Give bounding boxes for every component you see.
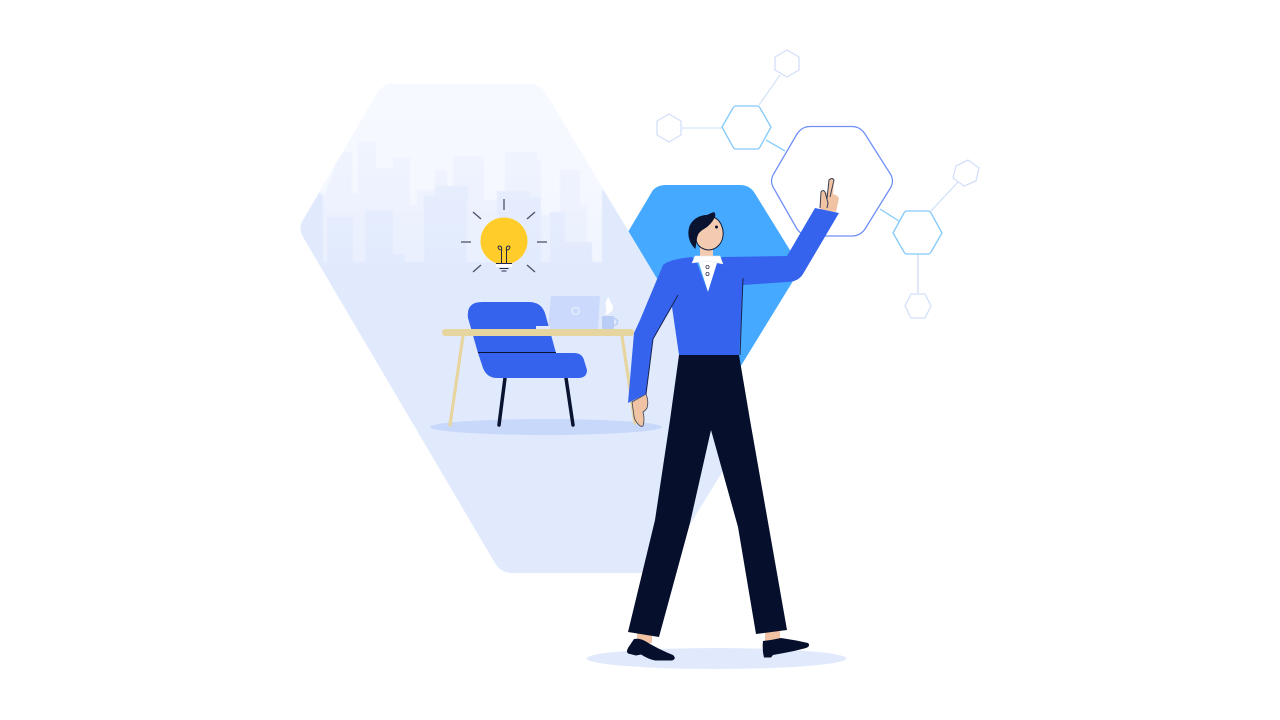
small pale hexagons [657,50,979,318]
skyline [320,84,604,262]
chair [468,302,587,425]
desk shadow [430,419,662,435]
laptop [536,296,600,329]
large outlined hexagon [772,126,892,236]
shirt [698,260,717,292]
bulb rays [461,199,547,272]
shoes [627,638,809,660]
network links [682,75,958,293]
pale hexagon with city skyline [300,84,722,573]
foreground buildings [328,186,592,262]
sky [320,84,604,262]
coffee cup [602,297,618,329]
illustration [300,50,980,669]
light bulb [461,199,547,272]
face [696,217,723,250]
desk [442,329,635,425]
person [627,178,839,660]
background buildings [323,141,587,262]
blue hexagon [628,185,801,400]
ankles [637,630,780,643]
neck [700,240,713,258]
trousers [628,355,787,637]
lowered hand [632,394,648,426]
hair [688,212,715,249]
medium light-blue hexagons [722,106,942,254]
person ground shadow [586,648,846,669]
sweater [628,208,839,403]
collar [692,256,723,264]
pointing hand [820,178,839,212]
eye [715,226,718,228]
shirt buttons [706,265,709,276]
